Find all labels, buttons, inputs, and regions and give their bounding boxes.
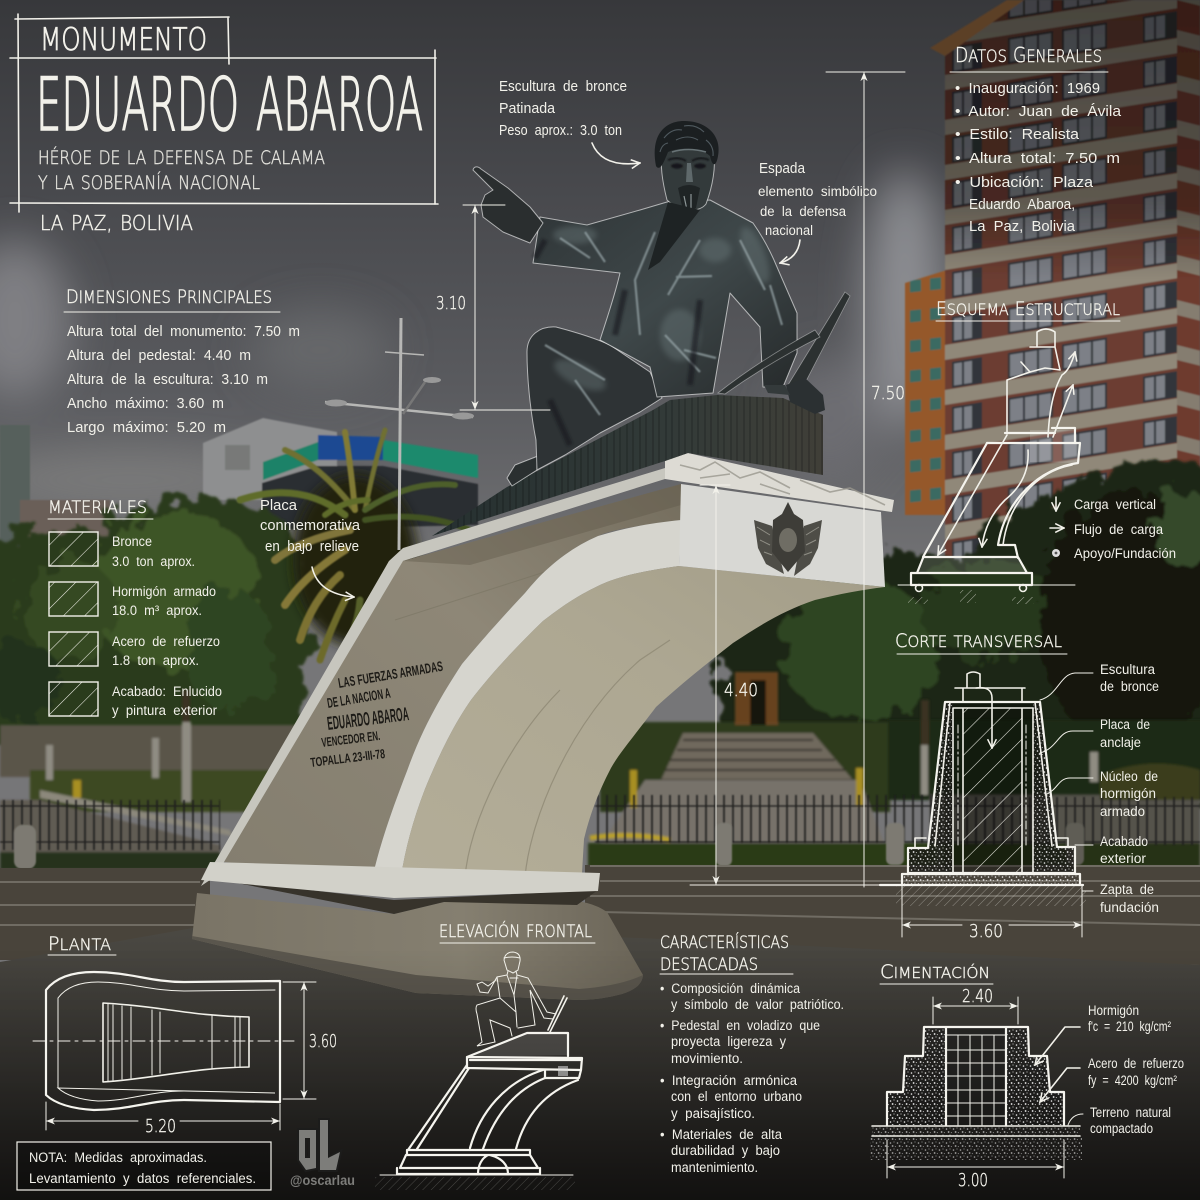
callout: escultura de bronce: Escultura [1100, 662, 1155, 677]
callout: núcleo: hormigón [1100, 786, 1156, 801]
panel: características destacadas: DESTACADAS [660, 955, 758, 975]
panel: características destacadas: mantenimiento. [671, 1160, 758, 1175]
statue sword [718, 292, 850, 414]
annotation: placa conmemorativa: conmemorativa [260, 517, 361, 534]
legend: carga vertical: Carga vertical [1074, 497, 1156, 512]
callout: zapata: Zapta de [1100, 882, 1154, 897]
panel: dimensiones principales: DIMENSIONES PRINCIPALES [66, 286, 272, 308]
callout: acero: fy = 4200 kg/cm² [1088, 1073, 1177, 1088]
swatch: acero: Acero de refuerzo [112, 634, 220, 649]
annotation: espada: elemento simbólico [758, 184, 877, 199]
plaque inscription: LAS FUERZAS ARMADAS [337, 658, 444, 691]
title: eduardo abaroa: EDUARDO ABAROA [36, 63, 423, 148]
panel: características destacadas: y paisajístico. [671, 1106, 755, 1121]
swatch: acabado: Acabado: Enlucido [112, 684, 222, 699]
panel: características destacadas: • Materiales de alta [660, 1127, 782, 1142]
annotation: escultura de bronce [499, 78, 640, 164]
panel: características destacadas: con el entorno urbano [671, 1089, 802, 1104]
panel: características destacadas: CARACTERÍSTICAS [660, 931, 789, 953]
annotation: espada: Espada [759, 160, 806, 177]
callout: placa de anclaje: Placa de [1100, 717, 1150, 732]
foundation diagram: 2.40 [962, 986, 993, 1007]
panel: características destacadas [660, 931, 844, 1175]
structural diagram [898, 329, 1080, 604]
annotation: espada: nacional [765, 223, 813, 238]
foundation diagram: 3.00 [958, 1170, 988, 1191]
plaque inscription: TOPALLA 23-III-78 [310, 746, 386, 770]
subtitle [38, 146, 325, 194]
foundation diagram [870, 986, 1082, 1191]
dimension: 3.10: 3.10 [436, 293, 466, 314]
legend: apoyo: Apoyo/Fundación [1074, 546, 1176, 561]
legend: flujo de carga: Flujo de carga [1074, 522, 1163, 537]
panel: datos generales: La Paz, Bolivia [969, 218, 1076, 235]
panel: cimentación: CIMENTACIÓN [880, 961, 990, 983]
panel: datos generales: • Inauguración: 1969 [955, 80, 1100, 97]
plan drawing: 5.20 [145, 1116, 176, 1137]
monument pedestal photo [192, 453, 894, 1000]
swatch: acabado [49, 682, 222, 718]
callout: núcleo [1045, 769, 1158, 819]
panel: materiales [48, 498, 222, 718]
swatch: bronce: Bronce [112, 534, 152, 549]
panel: cimentación [870, 961, 1184, 1191]
swatch: acero [49, 632, 220, 668]
panel: datos generales: DATOS GENERALES [955, 43, 1102, 67]
callout: núcleo: Núcleo de [1100, 769, 1158, 784]
palm tree [240, 430, 470, 660]
callout: terreno: compactado [1090, 1121, 1153, 1136]
callout: acabado: Acabado [1100, 834, 1148, 849]
callout: zapata [1082, 882, 1159, 915]
title block [10, 14, 438, 235]
annotation: espada [758, 160, 877, 263]
panel: planta: PLANTA [48, 933, 111, 955]
dimension: 4.40: 4.40 [724, 680, 758, 701]
panel: corte transversal [880, 630, 1159, 942]
annotation: placa conmemorativa: Placa [260, 497, 298, 514]
author logo [290, 1120, 355, 1188]
panel: características destacadas: proyecta ligereza y [671, 1034, 786, 1049]
coat of arms [754, 502, 822, 576]
swatch: hormigón: Hormigón armado [112, 584, 216, 599]
panel: planta [33, 933, 337, 1137]
note box [17, 1142, 271, 1190]
note box: Levantamiento y datos referenciales. [29, 1171, 256, 1186]
panel: elevación frontal [375, 920, 595, 1190]
plaque inscription: VENCEDOR EN. [321, 728, 381, 750]
bronze statue [432, 121, 850, 536]
panel: dimensiones principales: Ancho máximo: 3.60 m [67, 395, 224, 412]
panel: elevación frontal: ELEVACIÓN FRONTAL [439, 920, 592, 942]
panel: datos generales: • Estilo: Realista [955, 126, 1080, 143]
subtitle: HÉROE DE LA DEFENSA DE CALAMA [38, 146, 325, 169]
section diagram: 3.60 [969, 921, 1003, 942]
callout: acabado [1075, 834, 1148, 866]
callout: acabado: exterior [1100, 851, 1147, 866]
panel: dimensiones principales: Altura total del monumento: 7.50 m [67, 323, 300, 340]
swatch: acero: 1.8 ton aprox. [112, 653, 199, 668]
swatch: hormigón: 18.0 m³ aprox. [112, 603, 202, 618]
panel: características destacadas: movimiento. [671, 1051, 743, 1066]
plaque inscription: EDUARDO ABAROA [326, 704, 410, 735]
note box: NOTA: Medidas aproximadas. [29, 1150, 207, 1165]
panel: esquema estructural [898, 298, 1176, 604]
callout: hormigón [1035, 1003, 1171, 1065]
swatch: bronce [49, 532, 195, 569]
panel: datos generales: • Ubicación: Plaza [955, 174, 1094, 191]
subtitle: Y LA SOBERANÍA NACIONAL [38, 171, 260, 194]
swatch: hormigón [49, 582, 216, 618]
callout: escultura de bronce [1040, 662, 1159, 700]
panel: características destacadas: • Composición dinámica [660, 981, 800, 996]
location: LA PAZ, BOLIVIA [40, 211, 193, 235]
callout: terreno: Terreno natural [1090, 1105, 1171, 1120]
panel: características destacadas: • Integración armónica [660, 1073, 797, 1088]
panel: dimensiones principales: Altura del pedestal: 4.40 m [67, 347, 251, 364]
panel: dimensiones principales: Largo máximo: 5.20 m [67, 419, 226, 436]
callout: terreno [1068, 1105, 1171, 1136]
statue face [668, 150, 709, 212]
plaque inscription: DE LA NACION A [326, 685, 392, 711]
panel: datos generales: • Autor: Juan de Ávila [955, 103, 1122, 120]
callout: placa de anclaje: anclaje [1100, 735, 1141, 750]
callout: acero [1040, 1056, 1184, 1102]
plaque inscription [310, 658, 444, 770]
annotation: escultura de bronce: Peso aprox.: 3.0 ton [499, 122, 622, 139]
annotation: escultura de bronce: Patinada [499, 100, 556, 117]
panel: características destacadas: • Pedestal en voladizo que [660, 1018, 820, 1033]
section diagram [880, 672, 1086, 942]
swatch: bronce: 3.0 ton aprox. [112, 554, 195, 569]
annotation: espada: de la defensa [760, 204, 846, 219]
elevation drawing [375, 952, 582, 1190]
plan drawing [33, 972, 337, 1137]
title: monumento: MONUMENTO [40, 22, 207, 58]
panel: corte transversal: CORTE TRANSVERSAL [895, 630, 1062, 652]
callout: placa de anclaje [1040, 717, 1150, 753]
panel: dimensiones principales [64, 286, 300, 436]
annotation: placa conmemorativa [260, 497, 361, 597]
callout: zapata: fundación [1100, 900, 1159, 915]
callout: escultura de bronce: de bronce [1100, 679, 1159, 694]
callout: acero: Acero de refuerzo [1088, 1056, 1184, 1071]
author logo: @oscarlau [290, 1172, 355, 1188]
panel: dimensiones principales: Altura de la escultura: 3.10 m [67, 371, 268, 388]
dimension: 7.50: 7.50 [871, 383, 905, 404]
panel: características destacadas: durabilidad y bajo [671, 1143, 780, 1158]
callout: hormigón: Hormigón [1088, 1003, 1139, 1018]
panel: datos generales: • Altura total: 7.50 m [955, 150, 1120, 167]
swatch: acabado: y pintura exterior [112, 703, 217, 718]
panel: datos generales: Eduardo Abaroa, [969, 196, 1075, 213]
callout: núcleo: armado [1100, 804, 1145, 819]
annotation: escultura de bronce: Escultura de bronce [499, 78, 627, 95]
annotation: placa conmemorativa: en bajo relieve [265, 538, 359, 555]
panel: materiales: MATERIALES [48, 498, 147, 518]
panel: características destacadas: y símbolo de valor patriótico. [671, 997, 844, 1012]
panel: datos generales [950, 43, 1122, 235]
plan drawing: 3.60 [309, 1031, 337, 1052]
statue hair [655, 121, 719, 168]
panel: esquema estructural: ESQUEMA ESTRUCTURAL [936, 298, 1120, 320]
callout: hormigón: f'c = 210 kg/cm² [1088, 1019, 1171, 1034]
